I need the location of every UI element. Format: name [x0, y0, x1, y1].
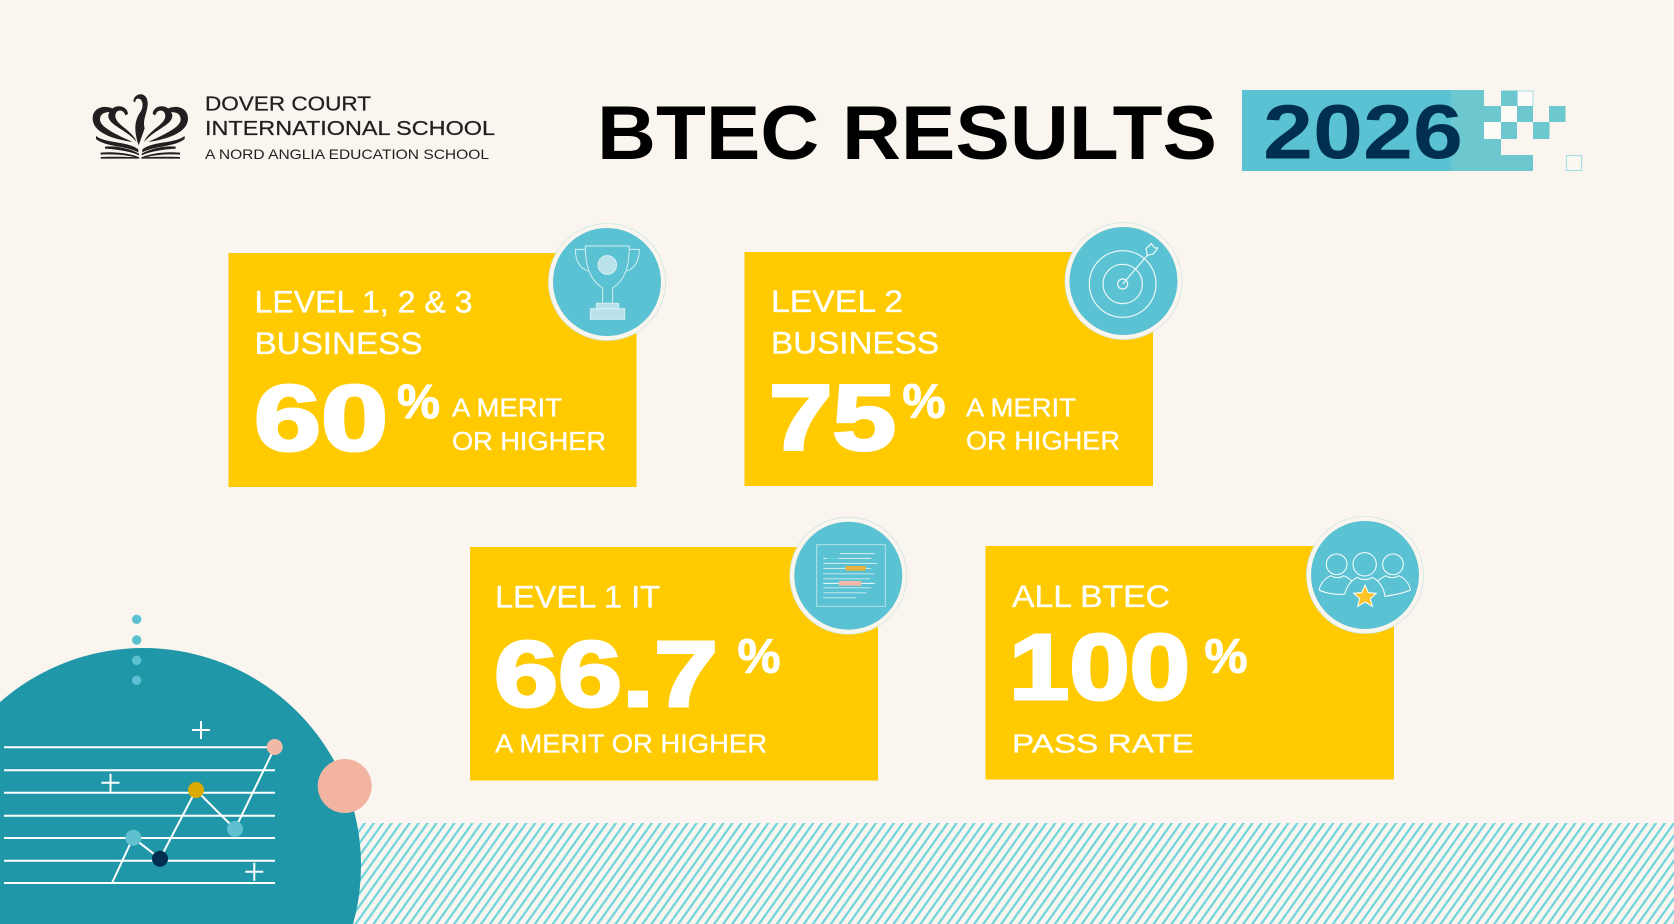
- panel: Level 1 IT: LEVEL 1 IT: [495, 578, 660, 614]
- panel: All BTEC: %: [1204, 630, 1248, 684]
- panel: Level 1 IT: [470, 517, 907, 780]
- icon: trophy: [548, 224, 666, 340]
- logo: Dover Court International School: [93, 93, 495, 162]
- panel: All BTEC: [986, 516, 1424, 780]
- logo text: DOVER COURT: [205, 93, 372, 116]
- year badge with pixel squares: [1242, 90, 1582, 176]
- decoration: pink circle: [318, 759, 372, 813]
- panel: Level 1, 2 & 3 Business: %: [397, 376, 440, 429]
- icon: document: [790, 517, 907, 634]
- panel: Level 2 Business: 75: [769, 366, 896, 470]
- panel: Level 2 Business: [744, 222, 1182, 486]
- logo: Dover Court International School: A NORD ANGLIA EDUCATION SCHOOL: [205, 146, 489, 162]
- panel: Level 1 IT: 66.7: [494, 622, 718, 726]
- title: BTEC RESULTS: [597, 91, 1217, 176]
- decoration: large teal circle with line chart: [0, 615, 361, 924]
- panel: Level 1 IT: A MERIT OR HIGHER: [495, 730, 767, 758]
- panel: Level 1 IT: %: [738, 630, 780, 684]
- icon: target with arrow: [1065, 222, 1182, 340]
- panel: Level 2 Business: BUSINESS: [771, 324, 939, 360]
- panel: Level 2 Business: A MERIT: [966, 394, 1076, 422]
- panel: Level 2 Business: OR HIGHER: [966, 428, 1120, 456]
- panel: Level 2 Business: LEVEL 2: [771, 283, 903, 319]
- panel: Level 1, 2 & 3 Business: 60: [254, 366, 388, 470]
- panel: Level 1, 2 & 3 Business: A MERIT: [452, 395, 562, 423]
- logo: Dover Court International School: INTERNATIONAL SCHOOL: [205, 117, 495, 140]
- panel: Level 1, 2 & 3 Business: LEVEL 1, 2 & 3: [254, 284, 472, 320]
- panel: Level 2 Business: %: [902, 376, 946, 428]
- panel: All BTEC: 100: [1009, 615, 1190, 719]
- panel: All BTEC: PASS RATE: [1012, 730, 1194, 758]
- panel: Level 1, 2 & 3 Business: [228, 224, 666, 487]
- dotted column: [132, 615, 141, 685]
- hatched band: [340, 823, 1674, 924]
- icon: people with star: [1306, 516, 1424, 634]
- pixel squares: [1484, 90, 1582, 170]
- panel: All BTEC: ALL BTEC: [1012, 578, 1170, 614]
- year: 2026: [1263, 90, 1463, 176]
- logo emblem: [93, 94, 188, 159]
- panel: Level 1, 2 & 3 Business: BUSINESS: [254, 325, 422, 361]
- panel: Level 1, 2 & 3 Business: OR HIGHER: [452, 428, 606, 456]
- line chart: [4, 721, 283, 883]
